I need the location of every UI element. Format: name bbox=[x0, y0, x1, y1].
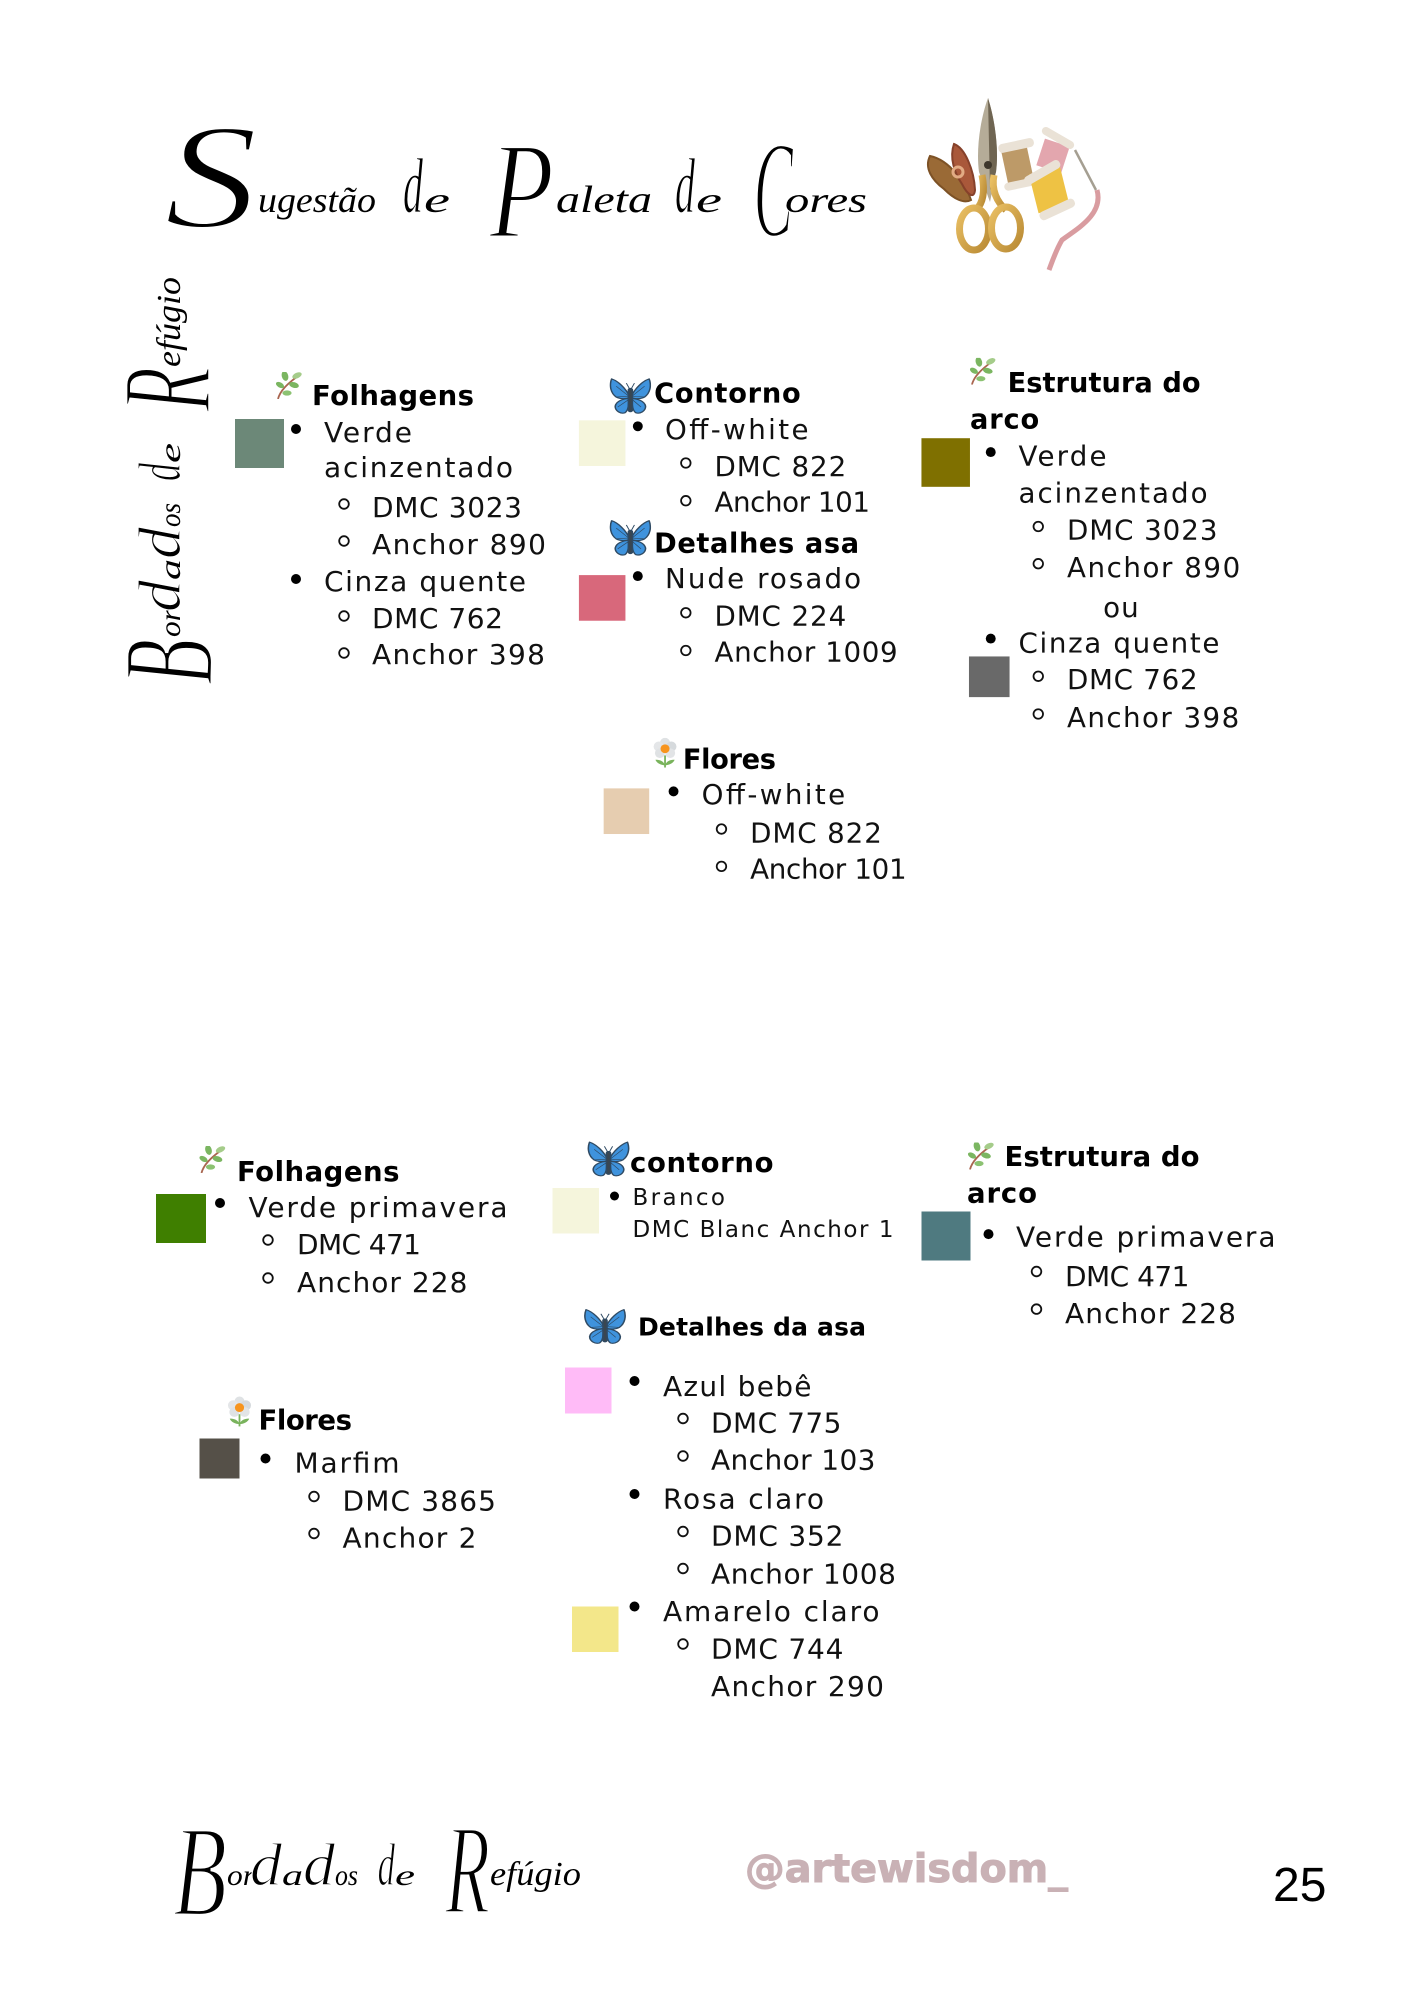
panel: detalhes da asa 2: DMC 352 bbox=[711, 1520, 844, 1552]
panel: folhagens 2: Verde primavera bbox=[248, 1191, 508, 1224]
swatch bbox=[579, 420, 625, 466]
handle: @artewisdom_ bbox=[745, 1847, 1069, 1892]
side script: Bordados de Refúgio: R bbox=[96, 367, 238, 430]
side script: Bordados de Refúgio: d bbox=[127, 579, 193, 612]
title: e bbox=[424, 180, 450, 220]
page number: 25 bbox=[1273, 1859, 1326, 1912]
footer script: Bordados de Refúgio: R bbox=[427, 1799, 490, 1941]
side script: Bordados de Refúgio: efúgio bbox=[151, 277, 188, 367]
panel: detalhes asa 1 bbox=[579, 521, 898, 668]
panel: estrutura do arco 2: Verde primavera bbox=[1016, 1220, 1276, 1254]
panel: folhagens 1: Cinza quente bbox=[324, 565, 526, 598]
swatch bbox=[604, 788, 649, 834]
panel: detalhes da asa 2: DMC 775 bbox=[711, 1406, 842, 1440]
panel: estrutura do arco 1: Anchor 890 bbox=[1067, 551, 1240, 584]
icon: butterfly bbox=[610, 379, 650, 413]
footer script: Bordados de Refúgio: efúgio bbox=[490, 1856, 581, 1893]
heading: contorno bbox=[630, 1147, 774, 1179]
icon: flower bbox=[654, 738, 676, 767]
panel: estrutura do arco 1: Verde bbox=[1018, 440, 1107, 473]
handles bbox=[976, 175, 984, 210]
panel: detalhes asa 1: Nude rosado bbox=[665, 562, 861, 595]
heading: Detalhes asa bbox=[654, 528, 859, 559]
pink spool bbox=[1036, 139, 1070, 173]
icon: butterfly bbox=[610, 521, 650, 555]
heading: Folhagens bbox=[237, 1156, 400, 1188]
panel: folhagens 1: acinzentado bbox=[324, 451, 513, 484]
panel: estrutura do arco 1: Anchor 398 bbox=[1067, 701, 1239, 734]
icon: sprig bbox=[969, 356, 996, 385]
panel: contorno 1: Anchor 101 bbox=[715, 486, 870, 519]
panel: folhagens 2 bbox=[156, 1144, 508, 1299]
title: d bbox=[393, 142, 424, 229]
panel: detalhes da asa 2: Azul bebê bbox=[663, 1370, 812, 1403]
title: C bbox=[739, 113, 794, 266]
icon: butterfly bbox=[585, 1310, 625, 1343]
side script: Bordados de Refúgio: d bbox=[127, 526, 193, 559]
yellow spool bbox=[1029, 167, 1070, 213]
panel: detalhes da asa 2: Amarelo claro bbox=[663, 1595, 880, 1628]
side script: Bordados de Refúgio: B bbox=[97, 639, 241, 685]
panel: contorno 2: Branco bbox=[632, 1185, 725, 1211]
panel: folhagens 2: Anchor 228 bbox=[297, 1266, 468, 1299]
panel: folhagens 1: DMC 3023 bbox=[372, 491, 522, 524]
panel: flores 1: Anchor 101 bbox=[750, 853, 907, 886]
panel: flores 2: Marfim bbox=[294, 1446, 400, 1480]
panel: folhagens 1: Anchor 890 bbox=[372, 528, 546, 561]
panel: estrutura do arco 1 bbox=[921, 356, 1240, 734]
thread bbox=[1049, 190, 1098, 270]
panel: flores 1 bbox=[604, 738, 907, 886]
title: e bbox=[696, 180, 722, 220]
heading: Estrutura do bbox=[1008, 368, 1201, 399]
panel: folhagens 1: DMC 762 bbox=[372, 602, 503, 635]
panel: estrutura do arco 1: ou bbox=[1103, 591, 1139, 624]
panel: detalhes da asa 2: Anchor 103 bbox=[711, 1444, 876, 1476]
icon: sprig bbox=[198, 1144, 226, 1173]
side script: Bordados de Refúgio: os bbox=[154, 503, 187, 527]
icon: flower bbox=[228, 1396, 251, 1426]
footer script: Bordados de Refúgio: or bbox=[227, 1859, 255, 1892]
needle bbox=[1075, 150, 1096, 190]
title: d bbox=[665, 142, 696, 229]
heading: Estrutura do bbox=[1004, 1141, 1200, 1173]
heading: Folhagens bbox=[312, 380, 474, 412]
footer script: Bordados de Refúgio: d bbox=[303, 1832, 336, 1898]
panel: estrutura do arco 1: DMC 3023 bbox=[1067, 513, 1217, 546]
panel: estrutura do arco 1: arco bbox=[970, 404, 1039, 435]
icon: sprig bbox=[967, 1141, 995, 1170]
panel: estrutura do arco 1: acinzentado bbox=[1018, 477, 1208, 510]
panel: detalhes da asa 2 bbox=[565, 1310, 896, 1703]
icon: butterfly bbox=[588, 1142, 629, 1176]
swatch bbox=[922, 1212, 970, 1260]
panel: contorno 2 bbox=[552, 1142, 894, 1243]
panel: contorno 1 bbox=[579, 378, 870, 519]
panel: estrutura do arco 1: DMC 762 bbox=[1067, 663, 1198, 696]
swatch bbox=[552, 1188, 599, 1234]
title: ores bbox=[785, 180, 867, 220]
heading: Flores bbox=[683, 745, 776, 776]
heading: Flores bbox=[258, 1404, 352, 1436]
panel: estrutura do arco 2 bbox=[922, 1141, 1276, 1330]
footer script: Bordados de Refúgio: B bbox=[173, 1800, 227, 1944]
beige spool bbox=[1000, 142, 1034, 184]
panel: detalhes da asa 2: Anchor 1008 bbox=[711, 1558, 896, 1590]
panel: contorno 1: Off-white bbox=[665, 413, 809, 446]
panel: estrutura do arco 2: Anchor 228 bbox=[1065, 1297, 1236, 1330]
swatch: olive bbox=[921, 438, 970, 487]
panel: flores 2: DMC 3865 bbox=[342, 1484, 496, 1518]
panel: folhagens 2: DMC 471 bbox=[297, 1228, 421, 1261]
panel: detalhes da asa 2: DMC 744 bbox=[711, 1632, 844, 1666]
swatch bbox=[579, 575, 625, 621]
panel: flores 1: Off-white bbox=[702, 778, 845, 811]
panel: detalhes da asa 2: Rosa claro bbox=[663, 1482, 824, 1516]
swatch: pink bbox=[565, 1368, 612, 1414]
illustration: scissors, thread spools and needle bbox=[928, 98, 1098, 270]
panel: folhagens 1: Verde bbox=[324, 416, 412, 449]
side script: Bordados de Refúgio: or bbox=[154, 609, 187, 637]
panel: detalhes asa 1: DMC 224 bbox=[715, 600, 846, 633]
panel: folhagens 1 bbox=[235, 370, 546, 671]
footer script: Bordados de Refúgio: d bbox=[250, 1832, 283, 1898]
panel: contorno 2: DMC Blanc Anchor 1 bbox=[632, 1217, 894, 1243]
footer script: Bordados de Refúgio: e bbox=[395, 1859, 415, 1892]
title: P bbox=[463, 114, 554, 267]
side script: Bordados de Refúgio: a bbox=[154, 559, 187, 580]
panel: detalhes da asa 2: Anchor 290 bbox=[711, 1670, 884, 1703]
footer script: Bordados de Refúgio: a bbox=[282, 1859, 303, 1892]
panel: estrutura do arco 2: DMC 471 bbox=[1065, 1260, 1190, 1293]
footer script: Bordados de Refúgio: d bbox=[369, 1832, 396, 1898]
panel: detalhes asa 1: Anchor 1009 bbox=[715, 635, 898, 668]
blades bbox=[978, 98, 997, 202]
panel: flores 1: DMC 822 bbox=[750, 816, 882, 849]
icon: sprig bbox=[275, 370, 303, 399]
title: ugestão bbox=[258, 180, 376, 220]
swatch: yellow bbox=[572, 1606, 618, 1652]
swatch: gray bbox=[969, 656, 1010, 697]
side script: Bordados de Refúgio: d bbox=[127, 462, 193, 490]
heading: Contorno bbox=[654, 378, 801, 410]
footer script: Bordados de Refúgio: os bbox=[335, 1859, 358, 1892]
panel: estrutura do arco 2: arco bbox=[967, 1178, 1037, 1210]
skeins bbox=[928, 144, 975, 201]
panel: contorno 1: DMC 822 bbox=[715, 450, 846, 483]
side script: Bordados de Refúgio: e bbox=[154, 443, 187, 463]
panel: estrutura do arco 1: Cinza quente bbox=[1018, 626, 1219, 659]
panel: flores 2 bbox=[200, 1396, 496, 1554]
swatch bbox=[156, 1194, 206, 1243]
panel: folhagens 1: Anchor 398 bbox=[372, 638, 545, 671]
panel: flores 2: Anchor 2 bbox=[342, 1522, 476, 1554]
title: aleta bbox=[556, 179, 652, 221]
title: S bbox=[164, 94, 258, 260]
swatch bbox=[235, 419, 284, 468]
heading: Detalhes da asa bbox=[638, 1312, 866, 1342]
swatch bbox=[200, 1438, 240, 1478]
